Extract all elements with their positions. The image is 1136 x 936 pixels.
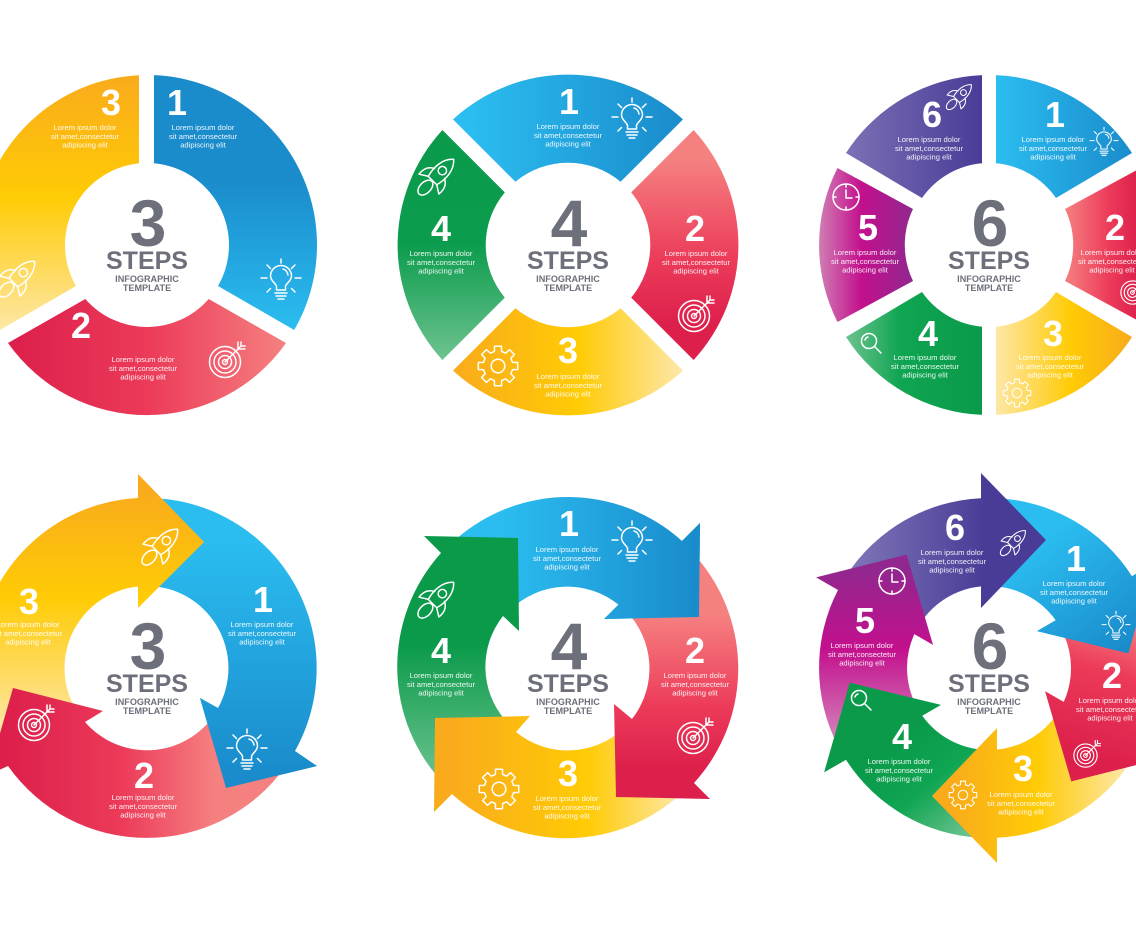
panel: 4 steps pie — [398, 75, 738, 415]
step 1 text: sit amet,consectetur — [533, 554, 601, 563]
step 4 text: Lorem ipsum dolor — [894, 353, 956, 362]
arrow 1 head — [1037, 564, 1136, 653]
step 3 number: 3 — [19, 581, 39, 622]
arrow 2 red — [614, 550, 738, 799]
icon: magnifier — [852, 690, 871, 710]
icon: target — [1074, 740, 1100, 767]
step 2 number: 2 — [71, 305, 91, 346]
step 5 text: adipiscing elit — [842, 266, 889, 275]
step 4 text: adipiscing elit — [876, 775, 923, 784]
center label: TEMPLATE — [123, 706, 171, 716]
step 6 text: adipiscing elit — [929, 566, 976, 575]
step 1 number: 1 — [559, 81, 579, 122]
center label — [106, 186, 188, 293]
step 4 text: adipiscing elit — [902, 371, 949, 380]
step 1 text: adipiscing elit — [1051, 597, 1098, 606]
step 1 text: adipiscing elit — [1030, 153, 1077, 162]
step 4 text: Lorem ipsum dolor — [868, 757, 930, 766]
center label — [948, 609, 1030, 716]
arrow 1 blue — [145, 498, 317, 788]
segment 2 red — [8, 299, 286, 415]
step 1 text: adipiscing elit — [180, 141, 227, 150]
step 2 number: 2 — [685, 208, 705, 249]
arrow 5 magenta — [816, 555, 933, 746]
step 6 number: 6 — [945, 507, 965, 548]
step 2 text: adipiscing elit — [120, 811, 167, 820]
step 3 text: adipiscing elit — [1027, 371, 1074, 380]
step 1 text: adipiscing elit — [545, 140, 592, 149]
panel: 3 steps arrows — [0, 474, 317, 838]
segment 3 yellow — [996, 292, 1132, 415]
step 4 text: adipiscing elit — [418, 689, 465, 698]
step 3 text: adipiscing elit — [998, 808, 1045, 817]
icon: magnifier — [862, 334, 881, 353]
step 3 text: adipiscing elit — [544, 812, 591, 821]
step 1 text: sit amet,consectetur — [1040, 588, 1108, 597]
center label — [527, 186, 609, 293]
step 1 number: 1 — [559, 503, 579, 544]
icon: rocket — [940, 78, 978, 116]
step 1 text: Lorem ipsum dolor — [172, 123, 234, 132]
step 3 number: 3 — [1043, 313, 1063, 354]
icon: rocket — [0, 251, 45, 306]
segment 4 green — [398, 130, 505, 360]
step 3 text: Lorem ipsum dolor — [537, 372, 599, 381]
center label — [527, 609, 609, 716]
icon: target — [678, 296, 714, 332]
step 6 text: Lorem ipsum dolor — [898, 135, 960, 144]
segment 2 red — [1065, 168, 1136, 322]
step 5 number: 5 — [858, 207, 878, 248]
step 4 text: sit amet,consectetur — [407, 258, 475, 267]
icon: gear — [478, 346, 518, 386]
icon: gear — [949, 781, 977, 809]
step 3 text: adipiscing elit — [62, 141, 109, 150]
panel: 6 steps pie — [819, 75, 1136, 415]
icon: light bulb — [612, 98, 652, 138]
segment 1 blue — [453, 75, 683, 182]
step 3 text: Lorem ipsum dolor — [54, 123, 116, 132]
segment 4 green — [846, 292, 982, 415]
step 3 text: Lorem ipsum dolor — [1019, 353, 1081, 362]
arrow 4 green — [824, 683, 984, 838]
center label: STEPS — [948, 247, 1030, 275]
step 2 text: Lorem ipsum dolor — [112, 355, 174, 364]
step 2 text: adipiscing elit — [672, 689, 719, 698]
step 6 text: sit amet,consectetur — [918, 557, 986, 566]
step 4 number: 4 — [431, 630, 451, 671]
step 2 text: adipiscing elit — [673, 267, 720, 276]
step 1 text: Lorem ipsum dolor — [537, 122, 599, 131]
center label: 6 — [972, 186, 1008, 260]
step 3 text: Lorem ipsum dolor — [990, 790, 1052, 799]
step 3 number: 3 — [101, 82, 121, 123]
step 5 text: sit amet,consectetur — [828, 650, 896, 659]
step 1 number: 1 — [1045, 94, 1065, 135]
center label: INFOGRAPHIC — [536, 697, 600, 707]
step 1 text: Lorem ipsum dolor — [1022, 135, 1084, 144]
step 2 text: sit amet,consectetur — [109, 364, 177, 373]
step 3 text: adipiscing elit — [5, 638, 52, 647]
icon: rocket — [994, 524, 1032, 562]
center label: STEPS — [527, 247, 609, 275]
icon: clock — [879, 568, 905, 594]
step 1 text: sit amet,consectetur — [534, 131, 602, 140]
center label: STEPS — [527, 670, 609, 698]
step 1 text: Lorem ipsum dolor — [536, 545, 598, 554]
icon: gear — [479, 769, 519, 809]
step 1 text: sit amet,consectetur — [169, 132, 237, 141]
icon: rocket — [133, 519, 188, 574]
panel: 3 steps pie — [0, 75, 317, 415]
center label: INFOGRAPHIC — [115, 274, 179, 284]
step 6 number: 6 — [922, 94, 942, 135]
arrow 4 green — [397, 536, 519, 785]
icon: rocket — [409, 572, 464, 627]
icon: target — [210, 342, 245, 378]
step 1 text: adipiscing elit — [544, 563, 591, 572]
center label: INFOGRAPHIC — [536, 274, 600, 284]
arrow 3 yellow — [0, 474, 204, 750]
step 3 text: sit amet,consectetur — [534, 381, 602, 390]
arrow 1 blue — [455, 497, 700, 619]
icon: light bulb — [612, 521, 652, 561]
step 1 text: Lorem ipsum dolor — [1043, 579, 1105, 588]
step 1 text: Lorem ipsum dolor — [231, 620, 293, 629]
step 5 text: Lorem ipsum dolor — [834, 248, 896, 257]
icon: target — [18, 705, 54, 740]
center label: STEPS — [106, 247, 188, 275]
icon: target — [678, 718, 713, 754]
center label — [106, 609, 188, 716]
segment 2 red — [631, 130, 738, 360]
step 1 number: 1 — [167, 82, 187, 123]
step 4 text: sit amet,consectetur — [407, 680, 475, 689]
arrow 3 yellow — [932, 713, 1132, 863]
step 6 text: Lorem ipsum dolor — [921, 548, 983, 557]
center label: INFOGRAPHIC — [957, 697, 1021, 707]
icon: light bulb — [1090, 127, 1118, 155]
arrow 6 purple — [846, 473, 1046, 623]
step 2 number: 2 — [1105, 207, 1125, 248]
icon: clock — [833, 184, 859, 210]
icon: rocket — [409, 149, 464, 204]
icon: light bulb — [227, 729, 267, 769]
center label: TEMPLATE — [123, 283, 171, 293]
center label: TEMPLATE — [544, 706, 592, 716]
step 2 text: sit amet,consectetur — [662, 258, 730, 267]
step 3 number: 3 — [558, 753, 578, 794]
step 2 number: 2 — [685, 630, 705, 671]
step 3 text: sit amet,consectetur — [533, 803, 601, 812]
center label: STEPS — [106, 670, 188, 698]
center label: 3 — [130, 186, 166, 260]
step 2 text: Lorem ipsum dolor — [665, 249, 727, 258]
step 2 number: 2 — [1102, 655, 1122, 696]
step 4 text: Lorem ipsum dolor — [410, 671, 472, 680]
step 2 text: adipiscing elit — [1089, 266, 1136, 275]
arrow 3 yellow — [434, 716, 685, 838]
panel: 4 steps arrows — [397, 497, 738, 838]
step 3 text: sit amet,consectetur — [987, 799, 1055, 808]
step 3 number: 3 — [558, 330, 578, 371]
center label — [948, 186, 1030, 293]
step 6 text: sit amet,consectetur — [895, 144, 963, 153]
icon: light bulb — [1102, 611, 1130, 639]
step 2 text: adipiscing elit — [120, 373, 167, 382]
center label: 6 — [972, 609, 1008, 683]
step 1 text: sit amet,consectetur — [228, 629, 296, 638]
step 2 text: sit amet,consectetur — [109, 802, 177, 811]
step 2 number: 2 — [134, 755, 154, 796]
icon: target — [1121, 278, 1136, 304]
step 6 text: adipiscing elit — [906, 153, 953, 162]
step 3 text: sit amet,consectetur — [1016, 362, 1084, 371]
step 2 text: sit amet,consectetur — [661, 680, 729, 689]
step 2 text: Lorem ipsum dolor — [112, 793, 174, 802]
step 4 number: 4 — [431, 208, 451, 249]
step 4 text: adipiscing elit — [418, 267, 465, 276]
arrow 2 red — [1045, 590, 1136, 781]
center label: 4 — [551, 186, 588, 260]
step 3 text: adipiscing elit — [545, 390, 592, 399]
step 4 text: Lorem ipsum dolor — [410, 249, 472, 258]
center label: 3 — [130, 609, 166, 683]
step 5 number: 5 — [855, 600, 875, 641]
center label: TEMPLATE — [965, 706, 1013, 716]
center label: 4 — [551, 609, 588, 683]
step 4 number: 4 — [892, 716, 912, 757]
segment 3 yellow — [453, 308, 683, 415]
step 5 text: sit amet,consectetur — [831, 257, 899, 266]
icon: gear — [1003, 379, 1031, 407]
step 5 text: Lorem ipsum dolor — [831, 641, 893, 650]
segment 6 purple — [846, 75, 982, 198]
arrow 1 head — [200, 698, 317, 788]
step 4 number: 4 — [918, 313, 938, 354]
step 3 number: 3 — [1013, 748, 1033, 789]
arrow 1 blue — [994, 498, 1136, 653]
arrow 1 head — [604, 523, 700, 619]
step 3 text: sit amet,consectetur — [51, 132, 119, 141]
step 3 text: Lorem ipsum dolor — [536, 794, 598, 803]
arrow 2 red — [0, 688, 285, 838]
segment 5 magenta — [819, 168, 913, 322]
center label: TEMPLATE — [965, 283, 1013, 293]
segment 1 blue — [154, 75, 317, 330]
step 5 text: adipiscing elit — [839, 659, 886, 668]
icon: light bulb — [261, 259, 301, 299]
step 1 text: sit amet,consectetur — [1019, 144, 1087, 153]
panel: 6 steps arrows — [816, 473, 1136, 863]
step 1 text: adipiscing elit — [239, 638, 286, 647]
step 1 number: 1 — [253, 579, 273, 620]
step 2 text: Lorem ipsum dolor — [664, 671, 726, 680]
step 4 text: sit amet,consectetur — [891, 362, 959, 371]
segment 1 blue — [996, 75, 1132, 198]
center label: INFOGRAPHIC — [957, 274, 1021, 284]
segment 3 yellow — [0, 75, 139, 330]
center label: TEMPLATE — [544, 283, 592, 293]
step 1 number: 1 — [1066, 538, 1086, 579]
center label: INFOGRAPHIC — [115, 697, 179, 707]
step 4 text: sit amet,consectetur — [865, 766, 933, 775]
step 2 text: adipiscing elit — [1087, 714, 1134, 723]
center label: STEPS — [948, 670, 1030, 698]
